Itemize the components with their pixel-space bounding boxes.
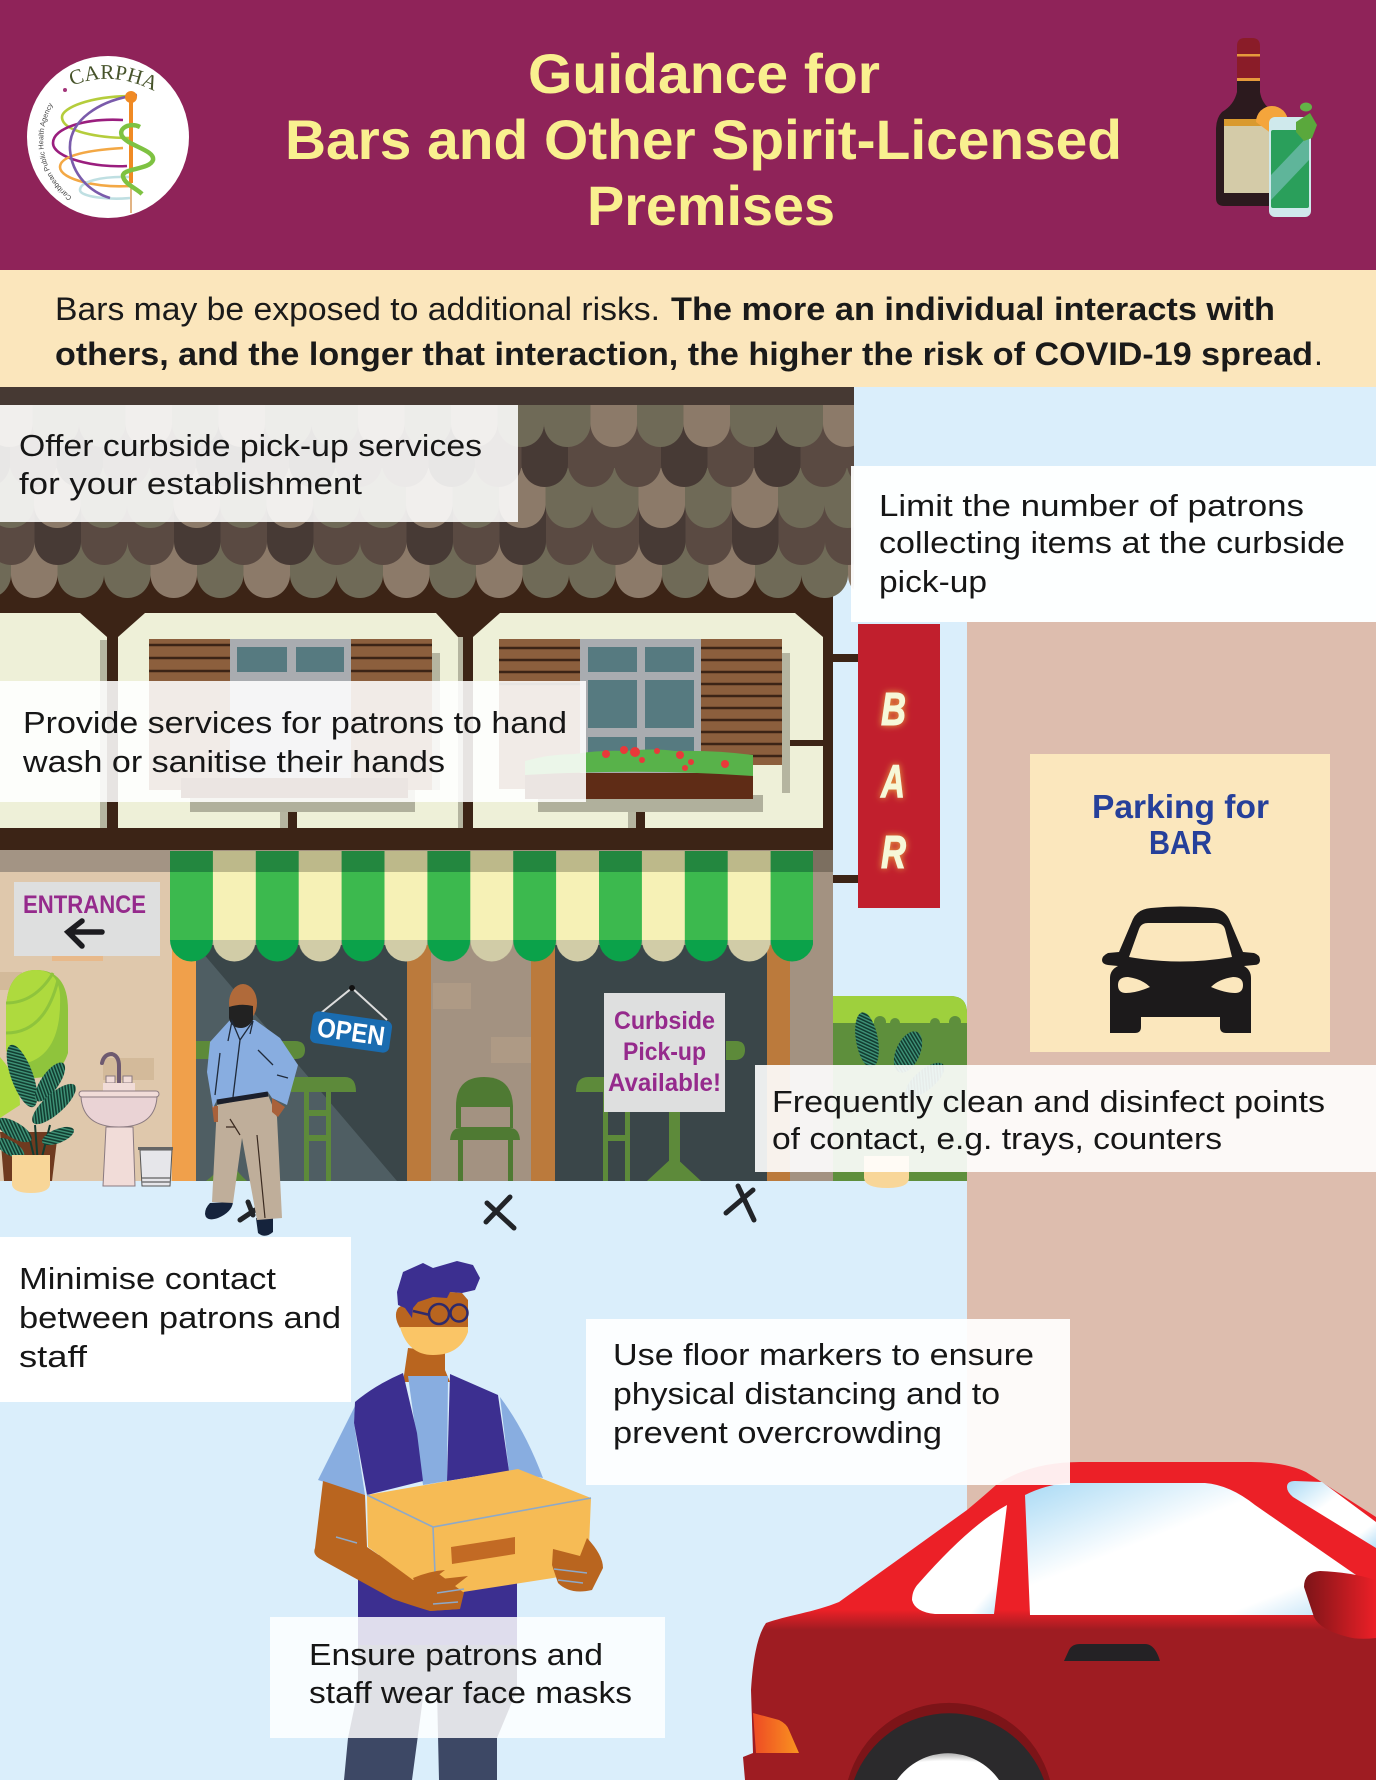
icon: car: [1102, 906, 1260, 1033]
intro statement panel: Bars may be exposed to additional risks.: [55, 291, 660, 327]
side mirror: [1304, 1571, 1376, 1639]
plant in pot: [0, 1041, 81, 1193]
parking area: [967, 622, 1376, 1780]
title: Premises: [587, 174, 835, 237]
window right with flower box: [499, 639, 790, 812]
sky background: [0, 387, 1376, 1780]
callout: limit patrons: collecting items at the curbside: [879, 525, 1345, 560]
furniture: [196, 1041, 745, 1181]
callout: curbside pick-up: for your establishment: [19, 466, 362, 501]
CARPHA logo: [27, 56, 189, 218]
open sign: [309, 985, 393, 1053]
bar sign: [833, 624, 940, 908]
CARPHA logo: Caribbean Public Health Agency: [38, 102, 71, 200]
curbside pick-up sign: Curbside: [614, 1007, 715, 1035]
roof shingles: [0, 405, 854, 598]
curbside pick-up sign: Pick-up: [623, 1038, 706, 1066]
callout: limit patrons: Limit the number of patrons: [879, 488, 1304, 523]
ground floor wall: [0, 850, 833, 1181]
staff member holding box: [314, 1261, 603, 1780]
storefront windows and pillars: [172, 945, 790, 1181]
callout: minimise contact: between patrons and: [19, 1300, 341, 1335]
bar sign: R: [881, 826, 906, 878]
neck: [403, 1348, 450, 1382]
callout: face masks: [270, 1617, 665, 1738]
callout: minimise contact: staff: [19, 1339, 87, 1374]
callout: curbside pick-up: Offer curbside pick-up services: [19, 428, 482, 463]
callout: clean and disinfect: [755, 1065, 1376, 1172]
title: Bars and Other Spirit-Licensed: [285, 108, 1122, 171]
callout: face masks: Ensure patrons and: [309, 1637, 603, 1672]
patron wearing mask: [205, 984, 298, 1236]
left shrub: [0, 970, 68, 1118]
upper storey: [0, 613, 823, 828]
building: [0, 387, 854, 1181]
door handle: [1064, 1644, 1160, 1661]
intro statement panel: The more an individual interacts with: [671, 291, 1275, 327]
hands: [413, 1538, 603, 1611]
header banner: [0, 0, 1376, 270]
open sign: OPEN: [315, 1012, 387, 1052]
callout: curbside pick-up: [0, 405, 518, 522]
curbside pick-up sign: [604, 993, 725, 1112]
sink and bin: [79, 1054, 173, 1186]
callout: limit patrons: pick-up: [879, 564, 987, 599]
right hedge with plant: [833, 996, 967, 1188]
intro statement panel: .: [1314, 336, 1323, 372]
callout: face masks: staff wear face masks: [309, 1675, 632, 1710]
parking sign: BAR: [1149, 824, 1212, 861]
tail light: [753, 1713, 799, 1753]
awning: [170, 851, 813, 962]
callout: floor markers: Use floor markers to ensure: [613, 1337, 1034, 1372]
callout: minimise contact: [0, 1237, 351, 1402]
callout: hand washing: wash or sanitise their hands: [22, 744, 445, 779]
vest lower: [358, 1555, 517, 1645]
callout: floor markers: [586, 1319, 1070, 1485]
callout: clean and disinfect: of contact, e.g. trays, counters: [772, 1121, 1222, 1156]
callout: limit patrons: [851, 466, 1376, 622]
box: [367, 1469, 591, 1592]
bar sign: A: [880, 755, 905, 807]
floor markers: [240, 1186, 754, 1228]
head: [396, 1261, 480, 1355]
callout: hand washing: [0, 681, 586, 802]
intro statement panel: others, and the longer that interaction, the higher the risk of COVID-19 spread: [55, 336, 1313, 372]
arrow: [68, 921, 102, 946]
callout: floor markers: physical distancing and to: [613, 1376, 1000, 1411]
callout: floor markers: prevent overcrowding: [613, 1415, 942, 1450]
callout: hand washing: Provide services for patrons to hand: [23, 705, 567, 740]
wheel: [848, 1703, 1050, 1780]
trousers: [344, 1617, 517, 1780]
parking sign: [1030, 754, 1330, 1052]
callout: clean and disinfect: Frequently clean and disinfect points: [772, 1084, 1325, 1119]
window left: [149, 639, 440, 812]
entrance sign: ENTRANCE: [23, 891, 146, 919]
CARPHA logo: CARPHA: [70, 65, 154, 91]
intro statement panel: [0, 270, 1376, 387]
red car: [743, 1462, 1376, 1780]
parking sign: Parking for: [1092, 788, 1269, 825]
bar sign: B: [881, 683, 906, 735]
car windows: [912, 1481, 1376, 1615]
entrance sign: [14, 882, 160, 956]
left arm: [314, 1481, 468, 1611]
title: Guidance for: [528, 42, 880, 105]
callout: minimise contact: Minimise contact: [19, 1261, 276, 1296]
curbside pick-up sign: Available!: [608, 1069, 721, 1097]
icon: bottle and cocktail: [1216, 38, 1317, 217]
title: [285, 42, 1122, 237]
